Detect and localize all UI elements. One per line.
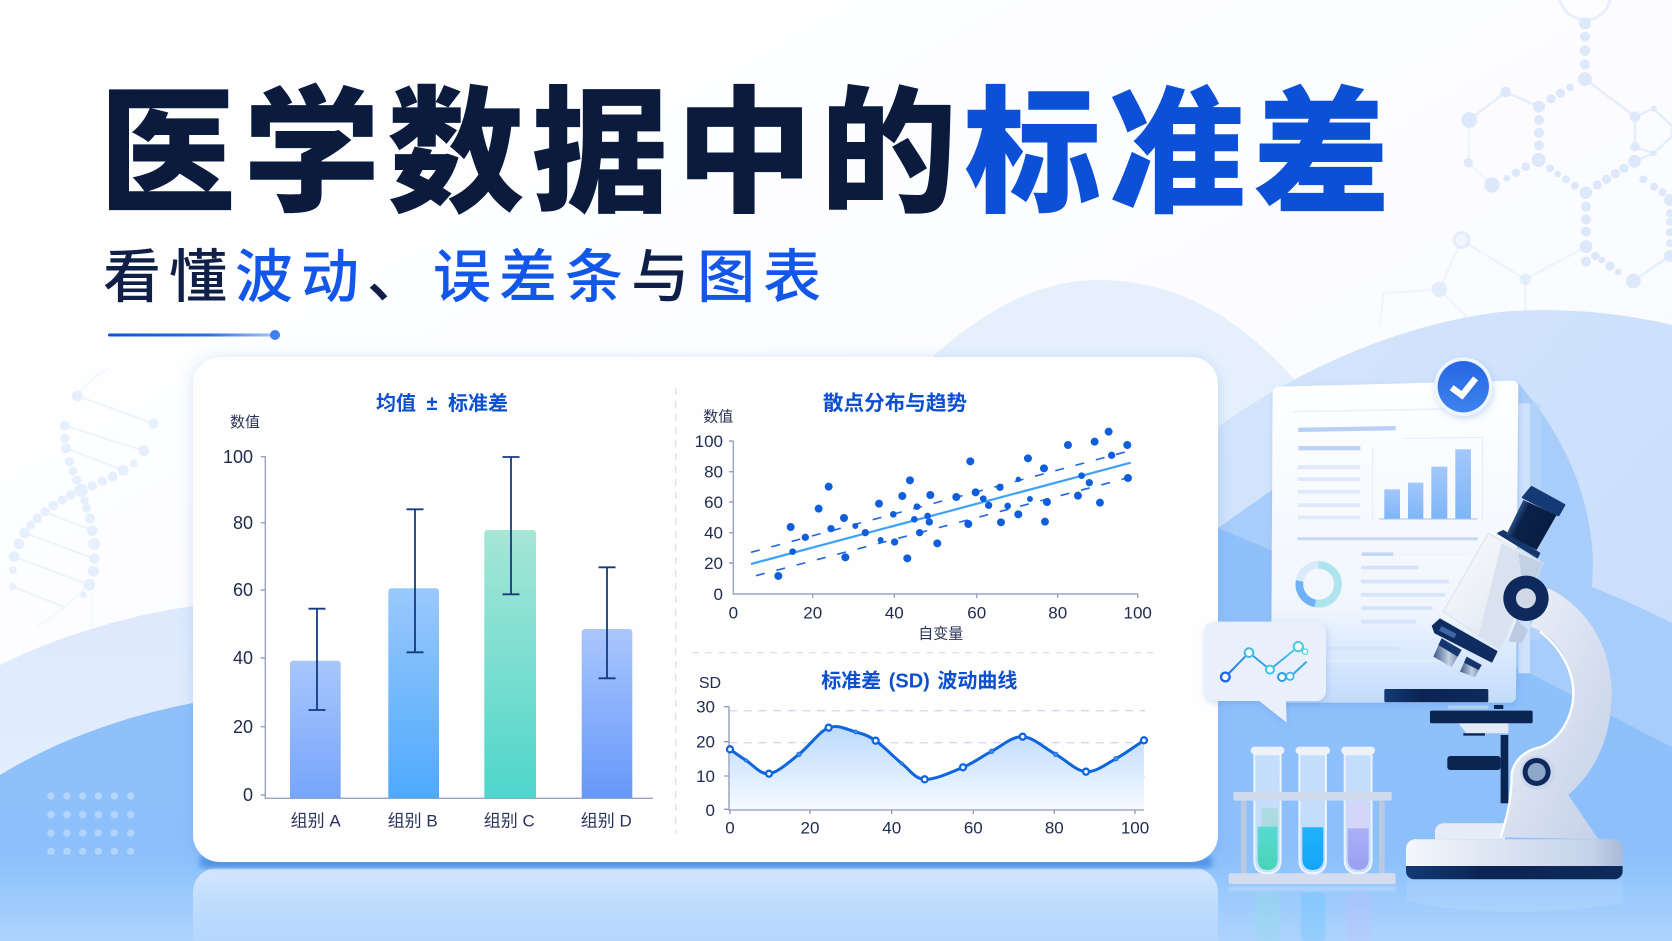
- bar chart title: 均值 ± 标准差: [376, 392, 508, 415]
- bar chart y ticks: 80: [233, 513, 253, 533]
- icon: verified check badge: [1434, 357, 1493, 416]
- tube: teal: [1251, 747, 1284, 873]
- SD x ticks: 20: [801, 818, 819, 838]
- microscope nosepiece: [1433, 619, 1497, 662]
- scatter x ticks: 60: [967, 604, 986, 622]
- scatter y ticks: 80: [704, 463, 723, 482]
- illustration: report document: [1271, 357, 1541, 703]
- illustration: chat bubble with line chart: [1204, 622, 1326, 723]
- bar chart y axis title: 数值: [230, 414, 260, 431]
- scatter chart with trend: [695, 392, 1152, 642]
- scatter y ticks: 100: [695, 432, 723, 451]
- bar chart group labels: 组别 C: [484, 812, 535, 830]
- SD y ticks: 30: [696, 698, 715, 716]
- bar: group D: [582, 629, 632, 798]
- SD fluctuation curve chart: [696, 670, 1149, 838]
- SD gridlines: [729, 711, 1145, 777]
- SD y axis title: SD: [699, 675, 721, 692]
- bar chart y ticks: 0: [243, 785, 253, 805]
- tube reflections: [1229, 887, 1396, 941]
- scatter y axis title: 数值: [703, 408, 733, 426]
- bar chart y ticks: [223, 447, 253, 805]
- microscope base: [1406, 839, 1623, 879]
- bar chart y ticks: 40: [233, 648, 253, 668]
- microscope lower knob: [1520, 755, 1555, 790]
- bar chart group labels: 组别 D: [581, 812, 632, 830]
- SD axes: [724, 707, 1144, 814]
- illustration: microscope: [1384, 487, 1623, 912]
- microscope focus pillar and side knob: [1447, 735, 1508, 803]
- bar: group B: [388, 588, 439, 798]
- rack posts: [1241, 801, 1385, 874]
- title: 医学数据中的标准差: [99, 78, 1397, 231]
- SD curve: [730, 726, 1144, 779]
- bar chart: mean and standard deviation: [223, 392, 653, 830]
- microscope head body: [1443, 533, 1543, 649]
- microscope stage: [1384, 689, 1533, 736]
- illustration: test tubes in rack: [1229, 747, 1396, 941]
- bar: group A: [290, 661, 341, 798]
- document donut chart: [1299, 565, 1338, 604]
- tube: purple: [1341, 747, 1375, 873]
- scatter x axis title: 自变量: [918, 626, 963, 642]
- SD x ticks: 40: [882, 818, 901, 838]
- SD area fill: [730, 726, 1144, 810]
- bar chart y ticks: 100: [223, 447, 253, 467]
- SD x ticks: 100: [1121, 818, 1149, 838]
- microscope foot step: [1435, 823, 1505, 839]
- scatter y ticks: 0: [714, 585, 723, 604]
- bar chart group labels: 组别 B: [388, 812, 438, 830]
- title underline accent: [108, 330, 280, 340]
- bar chart axes: [261, 456, 653, 798]
- SD x ticks: [725, 818, 1149, 838]
- microscope arm: [1501, 588, 1612, 839]
- DNA helix: [9, 368, 159, 627]
- panel reflection: [193, 868, 1218, 941]
- SD x ticks: 80: [1045, 818, 1064, 838]
- SD x ticks: 60: [964, 818, 983, 838]
- scatter x ticks: 20: [803, 604, 822, 622]
- scatter x ticks: 0: [729, 604, 738, 622]
- panel: charts card: [193, 357, 1218, 862]
- scatter x ticks: [729, 604, 1152, 622]
- SD y ticks: 10: [696, 767, 715, 786]
- bar chart group labels: 组别 A: [291, 812, 341, 830]
- bar: group C: [484, 530, 536, 798]
- tube: blue: [1296, 747, 1330, 873]
- scatter axes: [729, 441, 1138, 598]
- molecule hexagon pattern: [1380, 0, 1672, 327]
- rack top bar: [1233, 792, 1392, 801]
- scatter x ticks: 80: [1048, 604, 1067, 622]
- scatter points: [775, 428, 1132, 580]
- SD y ticks: 0: [706, 801, 715, 820]
- document bar chart: [1379, 449, 1477, 519]
- microscope base reflection: [1407, 881, 1623, 912]
- SD y ticks: [696, 698, 715, 820]
- bar chart group labels: [291, 812, 632, 830]
- scatter y ticks: 60: [704, 493, 723, 512]
- subtitle: 看懂波动、误差条与图表: [103, 245, 829, 310]
- microscope upper knob: [1503, 576, 1549, 621]
- bar chart y ticks: 20: [233, 717, 253, 737]
- rack base: [1229, 873, 1396, 884]
- microscope eyepiece: [1498, 487, 1564, 557]
- trend line and confidence band: [751, 451, 1131, 576]
- scatter x ticks: 100: [1124, 604, 1152, 622]
- scatter y ticks: 40: [704, 524, 723, 543]
- panel ground shadow: [200, 856, 1212, 868]
- SD y ticks: 20: [696, 732, 715, 752]
- scatter x ticks: 40: [885, 604, 904, 622]
- microscope objective lenses: [1433, 638, 1482, 677]
- scatter y ticks: 20: [704, 554, 723, 573]
- scatter y ticks: [695, 432, 723, 604]
- SD chart title: 标准差 (SD) 波动曲线: [821, 670, 1017, 692]
- dot grid decoration: [47, 792, 134, 855]
- panel dividers: [676, 388, 1160, 833]
- bubble sparkline: [1221, 642, 1308, 681]
- bar chart y ticks: 60: [233, 580, 253, 600]
- scatter title: 散点分布与趋势: [823, 392, 967, 415]
- SD x ticks: 0: [725, 818, 735, 838]
- error bars: [308, 457, 616, 710]
- SD markers: [727, 725, 1147, 782]
